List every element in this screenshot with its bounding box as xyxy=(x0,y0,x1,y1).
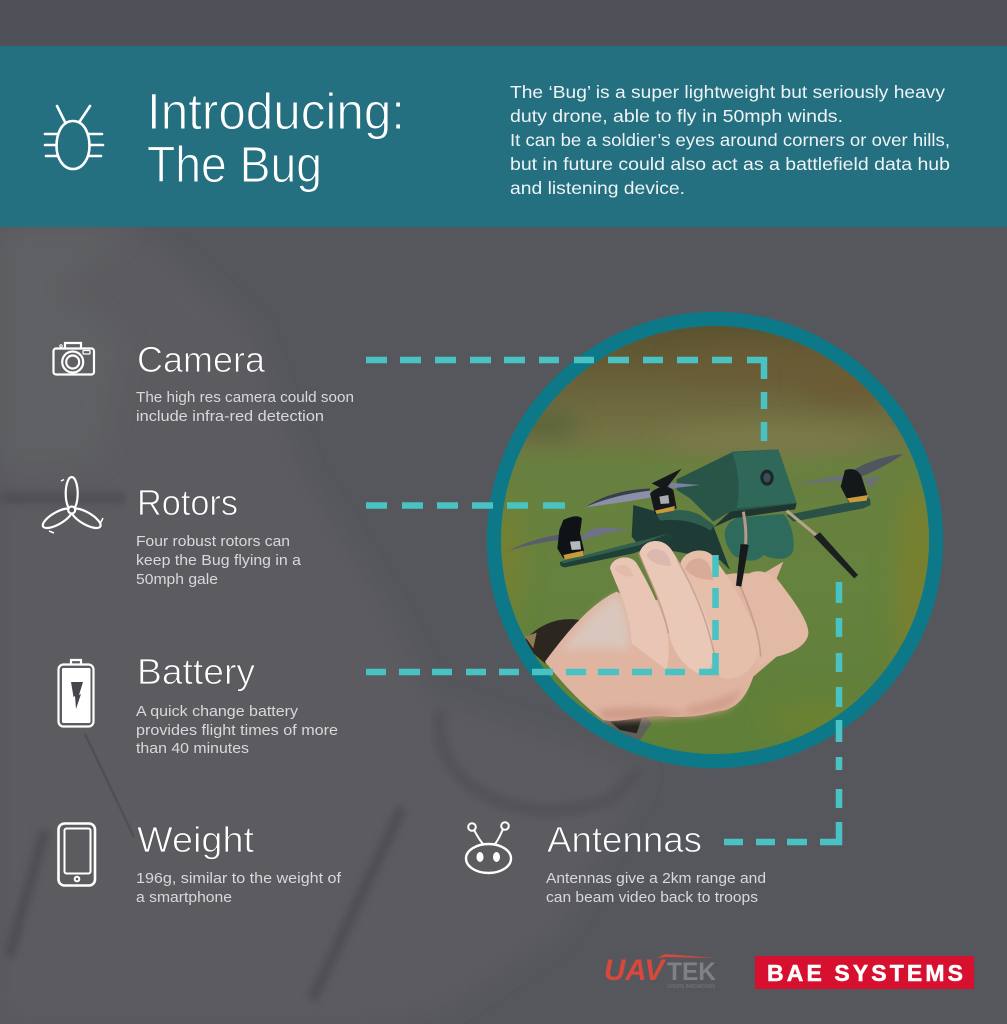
title: Introducing: xyxy=(147,83,405,140)
intro description: and listening device. xyxy=(510,178,685,198)
text: battery description xyxy=(136,704,338,757)
drone rear body xyxy=(632,505,730,570)
intro description: It can be a soldier’s eyes around corners or over hills, xyxy=(510,130,950,150)
heading: camera: Camera xyxy=(137,339,266,380)
header band xyxy=(0,0,1007,227)
heading: antennas: Antennas xyxy=(547,819,702,860)
text: camera description: include infra-red detection xyxy=(136,409,324,425)
text: rotors description: keep the Bug flying in a xyxy=(136,553,302,569)
icon: smartphone xyxy=(58,824,95,886)
drone shell xyxy=(677,449,797,522)
heading: weight: Weight xyxy=(137,819,254,860)
logo: UAVTEK: TEK xyxy=(667,958,716,986)
title: The Bug xyxy=(147,136,322,193)
feature: battery xyxy=(58,651,338,757)
text: battery description: than 40 minutes xyxy=(136,741,249,757)
drone curved arm xyxy=(657,510,714,531)
drone right arm xyxy=(787,498,871,522)
intro description: duty drone, able to fly in 50mph winds. xyxy=(510,106,843,126)
motors xyxy=(650,487,677,514)
feature: camera xyxy=(54,339,354,425)
text: camera description xyxy=(136,390,354,425)
drone photo circle xyxy=(494,319,940,761)
feature: rotors xyxy=(40,477,302,588)
icon: antenna creature xyxy=(466,822,511,873)
antennas leader xyxy=(724,582,839,842)
icon: camera xyxy=(54,343,94,374)
dashed leader lines xyxy=(366,360,764,441)
drone lower body xyxy=(725,514,794,561)
text: camera description: The high res camera could soon xyxy=(136,390,354,406)
logo: UAVTEK: UAV xyxy=(604,954,667,987)
title xyxy=(147,83,405,193)
icon: bug xyxy=(45,106,103,169)
intro description: but in future could also act as a battlefield data hub xyxy=(510,154,950,174)
heading: battery: Battery xyxy=(137,651,255,692)
fingers xyxy=(749,571,808,657)
text: weight description: 196g, similar to the weight of xyxy=(136,871,342,887)
feature: antennas xyxy=(466,819,766,906)
intro description: The ‘Bug’ is a super lightweight but seriously heavy xyxy=(510,82,945,102)
feature: weight xyxy=(58,819,342,906)
hand silhouette xyxy=(545,562,808,721)
text: battery description: provides flight times of more xyxy=(136,723,338,739)
propellers xyxy=(585,488,652,507)
drone camera xyxy=(760,470,774,486)
background: faded soldier photo xyxy=(4,232,134,950)
text: rotors description: 50mph gale xyxy=(136,572,218,588)
text: weight description: a smartphone xyxy=(136,890,232,906)
heading: rotors: Rotors xyxy=(137,482,238,523)
antennas xyxy=(743,512,746,544)
text: rotors description xyxy=(136,534,302,588)
icon: rotor xyxy=(40,477,103,533)
sleeve xyxy=(525,619,580,663)
icon: battery xyxy=(58,660,94,726)
logo: UAVTEK: UPDATE INNOVATIONS xyxy=(667,984,716,990)
logo: UAVTEK xyxy=(604,954,716,990)
text: weight description xyxy=(136,871,342,906)
intro description xyxy=(510,82,950,198)
text: rotors description: Four robust rotors can xyxy=(136,534,290,550)
camera leader xyxy=(366,360,764,441)
text: antennas description: can beam video back to troops xyxy=(546,890,758,906)
text: battery description: A quick change battery xyxy=(136,704,299,720)
battery leader xyxy=(366,555,716,672)
text: antennas description xyxy=(546,871,766,906)
rotors leader xyxy=(366,502,565,509)
text: antennas description: Antennas give a 2km range and xyxy=(546,871,766,887)
logo: BAE Systems: BAE SYSTEMS xyxy=(767,960,963,986)
